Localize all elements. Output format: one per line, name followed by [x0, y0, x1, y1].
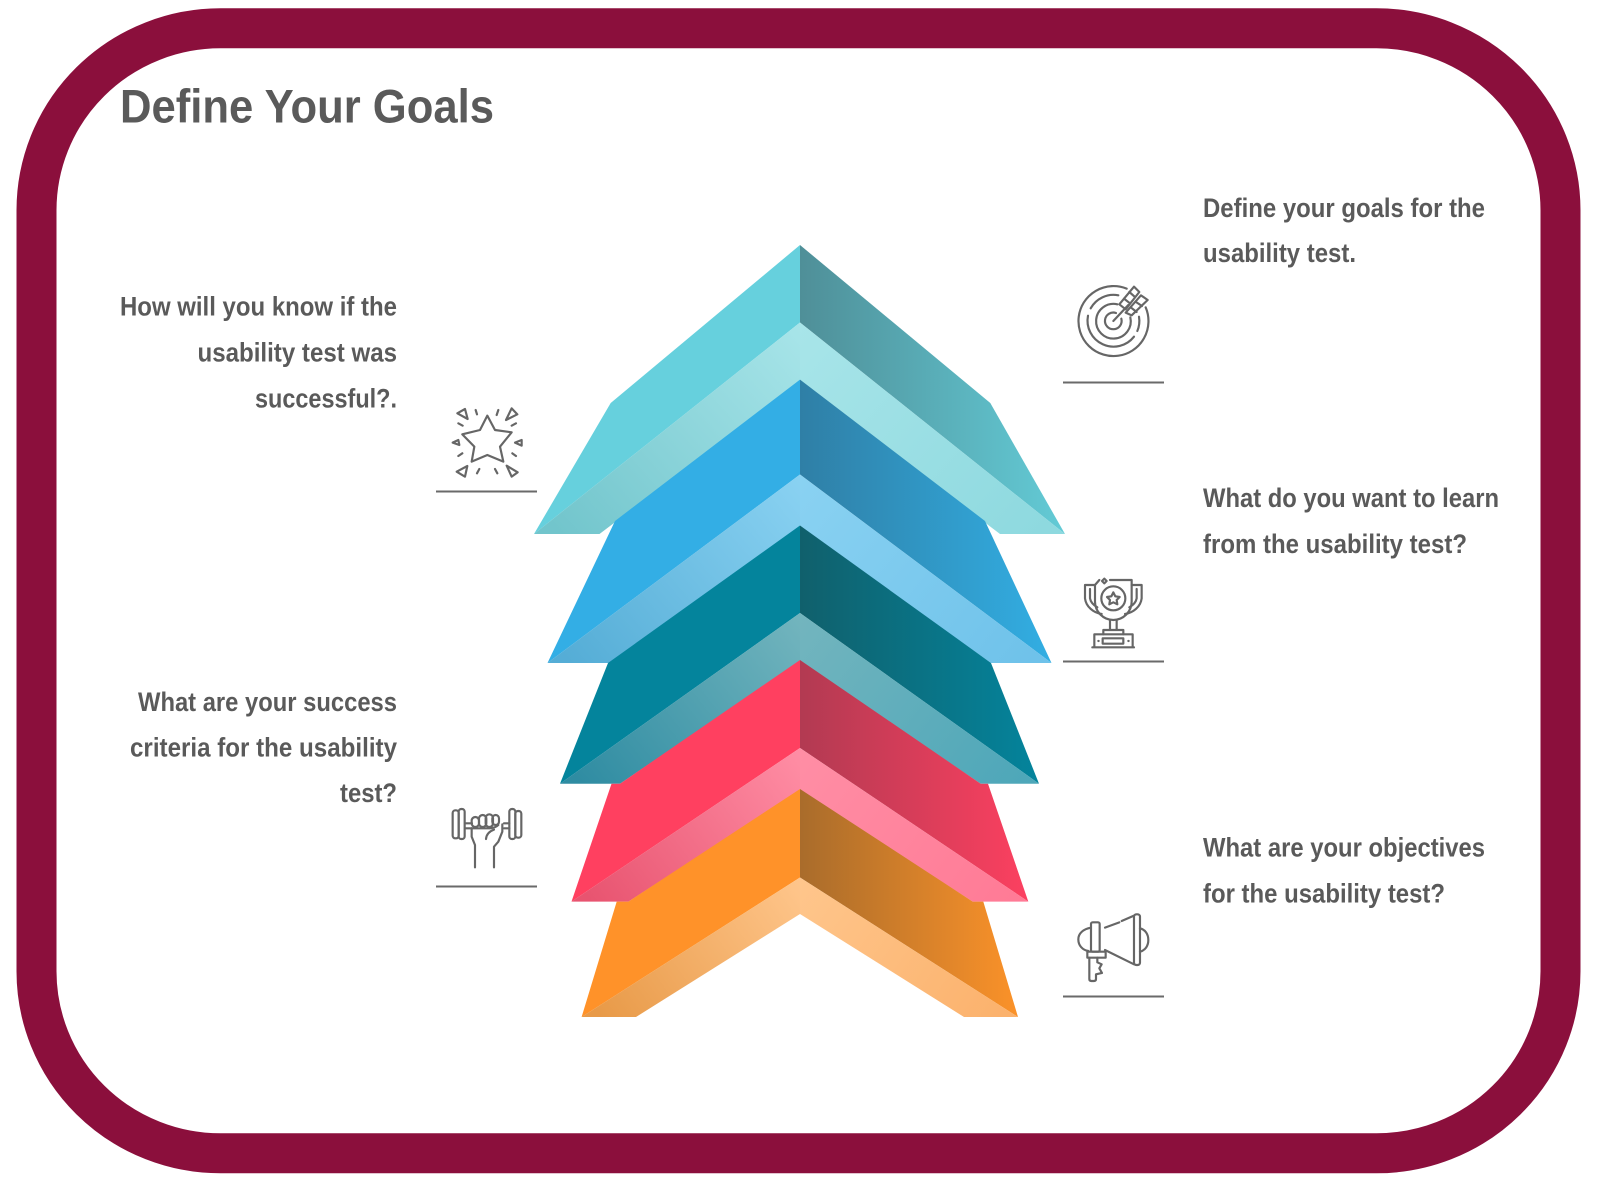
chevron: orange [582, 789, 1018, 1017]
text: how will you know: How will you know if the [120, 292, 397, 322]
chevron: dark teal [560, 526, 1039, 784]
icon: hand lifting dumbbell [453, 809, 521, 867]
text: success criteria: criteria for the usability [130, 732, 397, 762]
text: what do you want to learn: What do you want to learn [1203, 483, 1499, 513]
text: what are your objectives: for the usability test? [1203, 878, 1445, 908]
text: define your goals: usability test. [1203, 238, 1356, 268]
text: how will you know: successful?. [255, 384, 397, 414]
icon: trophy [1085, 579, 1142, 647]
icon: target with arrow [1078, 286, 1148, 356]
text: success criteria: What are your success [138, 687, 397, 717]
stacked chevron diagram [534, 245, 1065, 1017]
text: what are your objectives: What are your objectives [1203, 832, 1485, 862]
text: define your goals [1203, 193, 1485, 268]
text: success criteria [130, 687, 397, 808]
text: what do you want to learn [1203, 483, 1499, 559]
text: what are your objectives [1203, 832, 1485, 908]
text: define your goals: Define your goals for the [1203, 193, 1485, 223]
text: how will you know: usability test was [198, 338, 397, 368]
chevron: red [572, 660, 1028, 902]
chevron: blue [548, 380, 1052, 663]
chevron: teal [534, 245, 1065, 534]
text: success criteria: test? [340, 778, 397, 808]
icon: star with sparkles [453, 408, 522, 477]
title: Define Your Goals [120, 80, 494, 132]
text: how will you know [120, 292, 397, 414]
text: what do you want to learn: from the usability test? [1203, 529, 1467, 559]
icon: megaphone [1078, 914, 1148, 981]
